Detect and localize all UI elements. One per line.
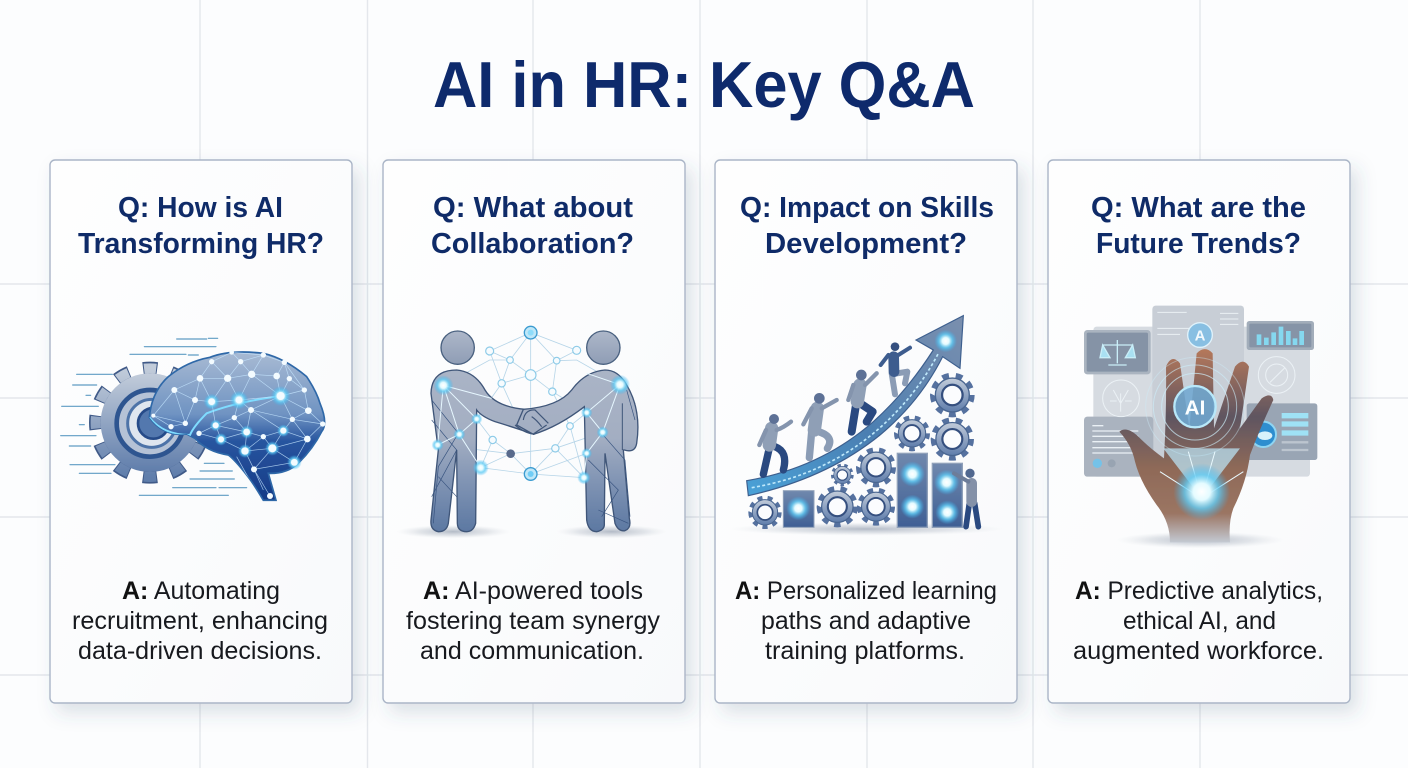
title: AI in HR: Key Q&A <box>433 48 975 121</box>
hub nodes <box>506 326 537 480</box>
network lines <box>438 333 620 478</box>
climbing figures <box>759 342 978 527</box>
brain nodes <box>204 386 302 470</box>
answer text <box>735 577 997 665</box>
AI badge <box>1174 386 1216 427</box>
question heading <box>431 192 634 260</box>
scales panel <box>1084 330 1151 374</box>
left person <box>431 331 533 532</box>
hand <box>1119 349 1273 542</box>
answer text: data-driven decisions. <box>78 637 322 665</box>
answer text <box>72 577 328 665</box>
question heading: Q: Impact on Skills <box>740 192 994 224</box>
speed lines <box>61 338 247 495</box>
palm glow <box>1160 448 1243 520</box>
small emblem panels <box>1103 312 1295 417</box>
document panel <box>1084 417 1153 477</box>
panel: how AI is transforming HR <box>50 160 352 703</box>
question heading: Transforming HR? <box>78 228 324 260</box>
gear <box>95 368 205 477</box>
info panel <box>1247 403 1317 460</box>
network nodes <box>486 346 581 452</box>
brain <box>149 350 325 500</box>
answer text: paths and adaptive <box>761 607 971 635</box>
question heading: Collaboration? <box>431 228 634 260</box>
hologram rings <box>1146 357 1244 456</box>
AI badge: AI <box>1185 396 1205 419</box>
card background <box>715 160 1017 703</box>
ground shadow <box>1117 532 1283 548</box>
question heading: Q: How is AI <box>118 192 283 224</box>
panel: future trends <box>1048 160 1350 703</box>
question heading <box>1091 192 1306 260</box>
gears <box>751 376 971 526</box>
icon: two people shaking hands with network <box>397 326 667 538</box>
icon: people climbing growth arrow with gears <box>730 316 1003 536</box>
ground shadows <box>397 525 667 538</box>
ground shadow <box>730 522 1003 536</box>
answer text: A: AI-powered tools <box>423 577 643 605</box>
answer text: A: Personalized learning <box>735 577 997 605</box>
glowing body nodes <box>432 375 630 484</box>
question heading: Future Trends? <box>1096 228 1301 260</box>
answer text: augmented workforce. <box>1073 637 1324 665</box>
answer text: recruitment, enhancing <box>72 607 328 635</box>
question heading: Q: What are the <box>1091 192 1306 224</box>
glowing bars <box>783 453 962 527</box>
card background <box>50 160 352 703</box>
card background <box>383 160 685 703</box>
panel: collaboration <box>383 160 685 703</box>
answer text: A: Predictive analytics, <box>1075 577 1323 605</box>
answer text <box>1073 577 1324 665</box>
right person <box>517 331 638 532</box>
icon: hand with holographic AI panels <box>1084 306 1317 548</box>
answer text <box>406 577 660 665</box>
chart panel <box>1247 321 1314 350</box>
card background <box>1048 160 1350 703</box>
panel: skills development <box>715 160 1017 703</box>
question heading <box>78 192 324 260</box>
icon: gear and neural brain <box>61 338 325 500</box>
question heading: Q: What about <box>433 192 633 224</box>
answer text: fostering team synergy <box>406 607 660 635</box>
answer text: and communication. <box>420 637 644 665</box>
A badge: A <box>1195 327 1206 344</box>
body mesh <box>432 390 635 523</box>
answer text: A: Automating <box>122 577 280 605</box>
answer text: training platforms. <box>765 637 965 665</box>
answer text: ethical AI, and <box>1123 607 1276 635</box>
question heading: Development? <box>765 228 967 260</box>
question heading <box>740 192 994 260</box>
handshake detail <box>515 410 548 434</box>
growth arrow <box>747 316 963 496</box>
back panels <box>1093 306 1310 477</box>
A badge <box>1188 323 1212 347</box>
